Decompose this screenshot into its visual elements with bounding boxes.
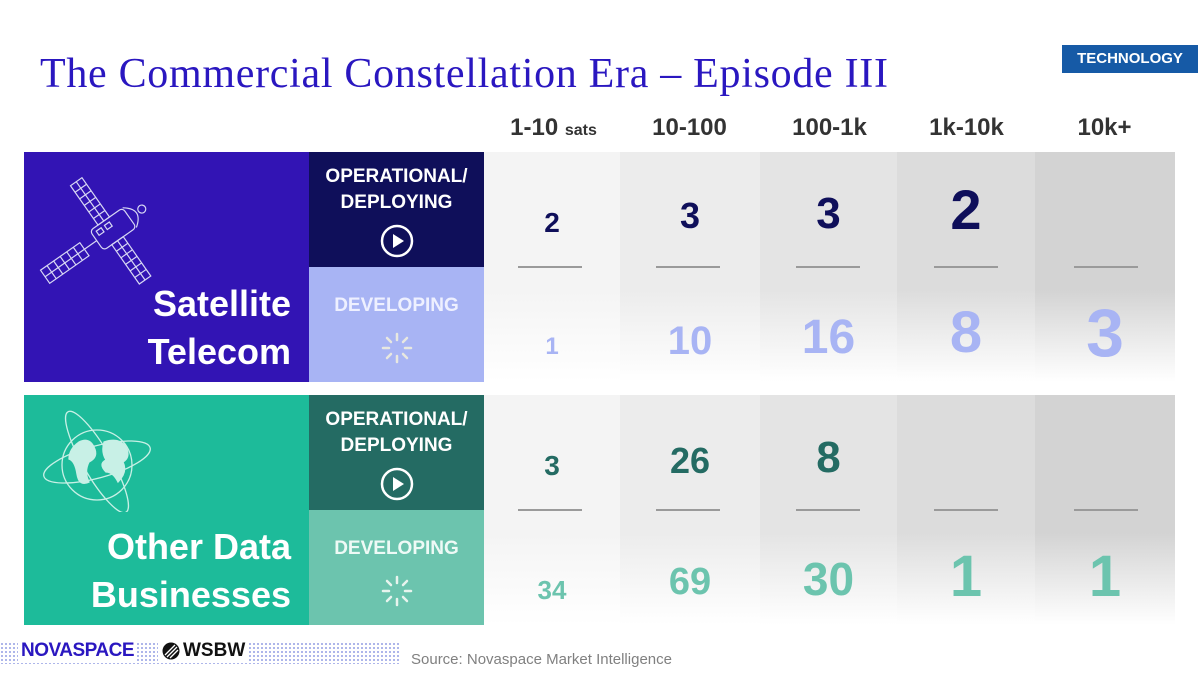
data: other data businesses numbers: 30 [803,553,854,605]
data: other data businesses numbers: 1 [1089,544,1121,609]
box: operational: OPERATIONAL/ [325,409,468,430]
box: operational: DEPLOYING [341,435,452,456]
data: satellite telecom numbers: 1 [545,333,559,360]
data: other data businesses numbers: 26 [670,440,710,481]
data: other data businesses numbers: 69 [669,561,711,603]
panel: other data businesses: Other Data [107,526,291,567]
data: other data businesses numbers [518,433,1138,609]
data: satellite telecom numbers: 3 [1086,295,1124,371]
icon: spinner [382,332,412,364]
data: other data businesses numbers: 3 [544,450,560,481]
icon: play [380,224,414,258]
box: operational: OPERATIONAL/ [325,166,468,187]
source: Source: Novaspace Market Intelligence [411,651,672,668]
panel: satellite telecom: Satellite [153,283,291,324]
title: The Commercial Constellation Era – Episode III [40,51,889,97]
data: other data businesses numbers: 34 [538,575,566,605]
box: operational: DEPLOYING [341,192,452,213]
footer logos: NOVASPACE [21,640,134,661]
panel: other data businesses [24,395,484,625]
box: developing: DEVELOPING [334,295,459,316]
data: satellite telecom numbers: 8 [950,300,982,365]
column headers: 100-1k [792,114,867,141]
column backgrounds section 1 [484,152,1175,364]
box: operational [309,152,484,267]
column headers: 10-100 [652,114,727,141]
data: other data businesses numbers: 1 [950,544,982,609]
column headers: 1k-10k [929,114,1004,141]
panel: other data businesses: Businesses [91,574,291,615]
box: operational [309,395,484,510]
data: other data businesses numbers: 8 [816,433,841,482]
icon: satellite [40,176,152,285]
panel: satellite telecom: Telecom [148,331,291,372]
badge: technology: TECHNOLOGY [1077,50,1183,67]
box: developing [309,510,484,625]
data: satellite telecom numbers: 16 [802,311,855,364]
data: satellite telecom numbers [518,178,1138,371]
footer logos: WSBW [183,640,245,661]
icon: globe [43,410,151,512]
column backgrounds section 2 [484,395,1175,608]
icon: play [380,468,414,500]
data: satellite telecom numbers: 3 [680,195,700,236]
data: satellite telecom numbers: 2 [544,207,560,238]
box: developing: DEVELOPING [334,538,459,559]
data: satellite telecom numbers: 10 [668,319,712,363]
icon: spinner [382,576,412,606]
column headers [510,114,1132,141]
data: satellite telecom numbers: 2 [950,178,982,241]
badge: technology [1062,45,1198,73]
box: developing [309,267,484,382]
column headers: 1-10 sats [510,114,597,141]
footer logos [1,640,399,664]
column headers: 10k+ [1077,114,1132,141]
data: satellite telecom numbers: 3 [816,189,841,238]
panel: satellite telecom [24,152,484,382]
